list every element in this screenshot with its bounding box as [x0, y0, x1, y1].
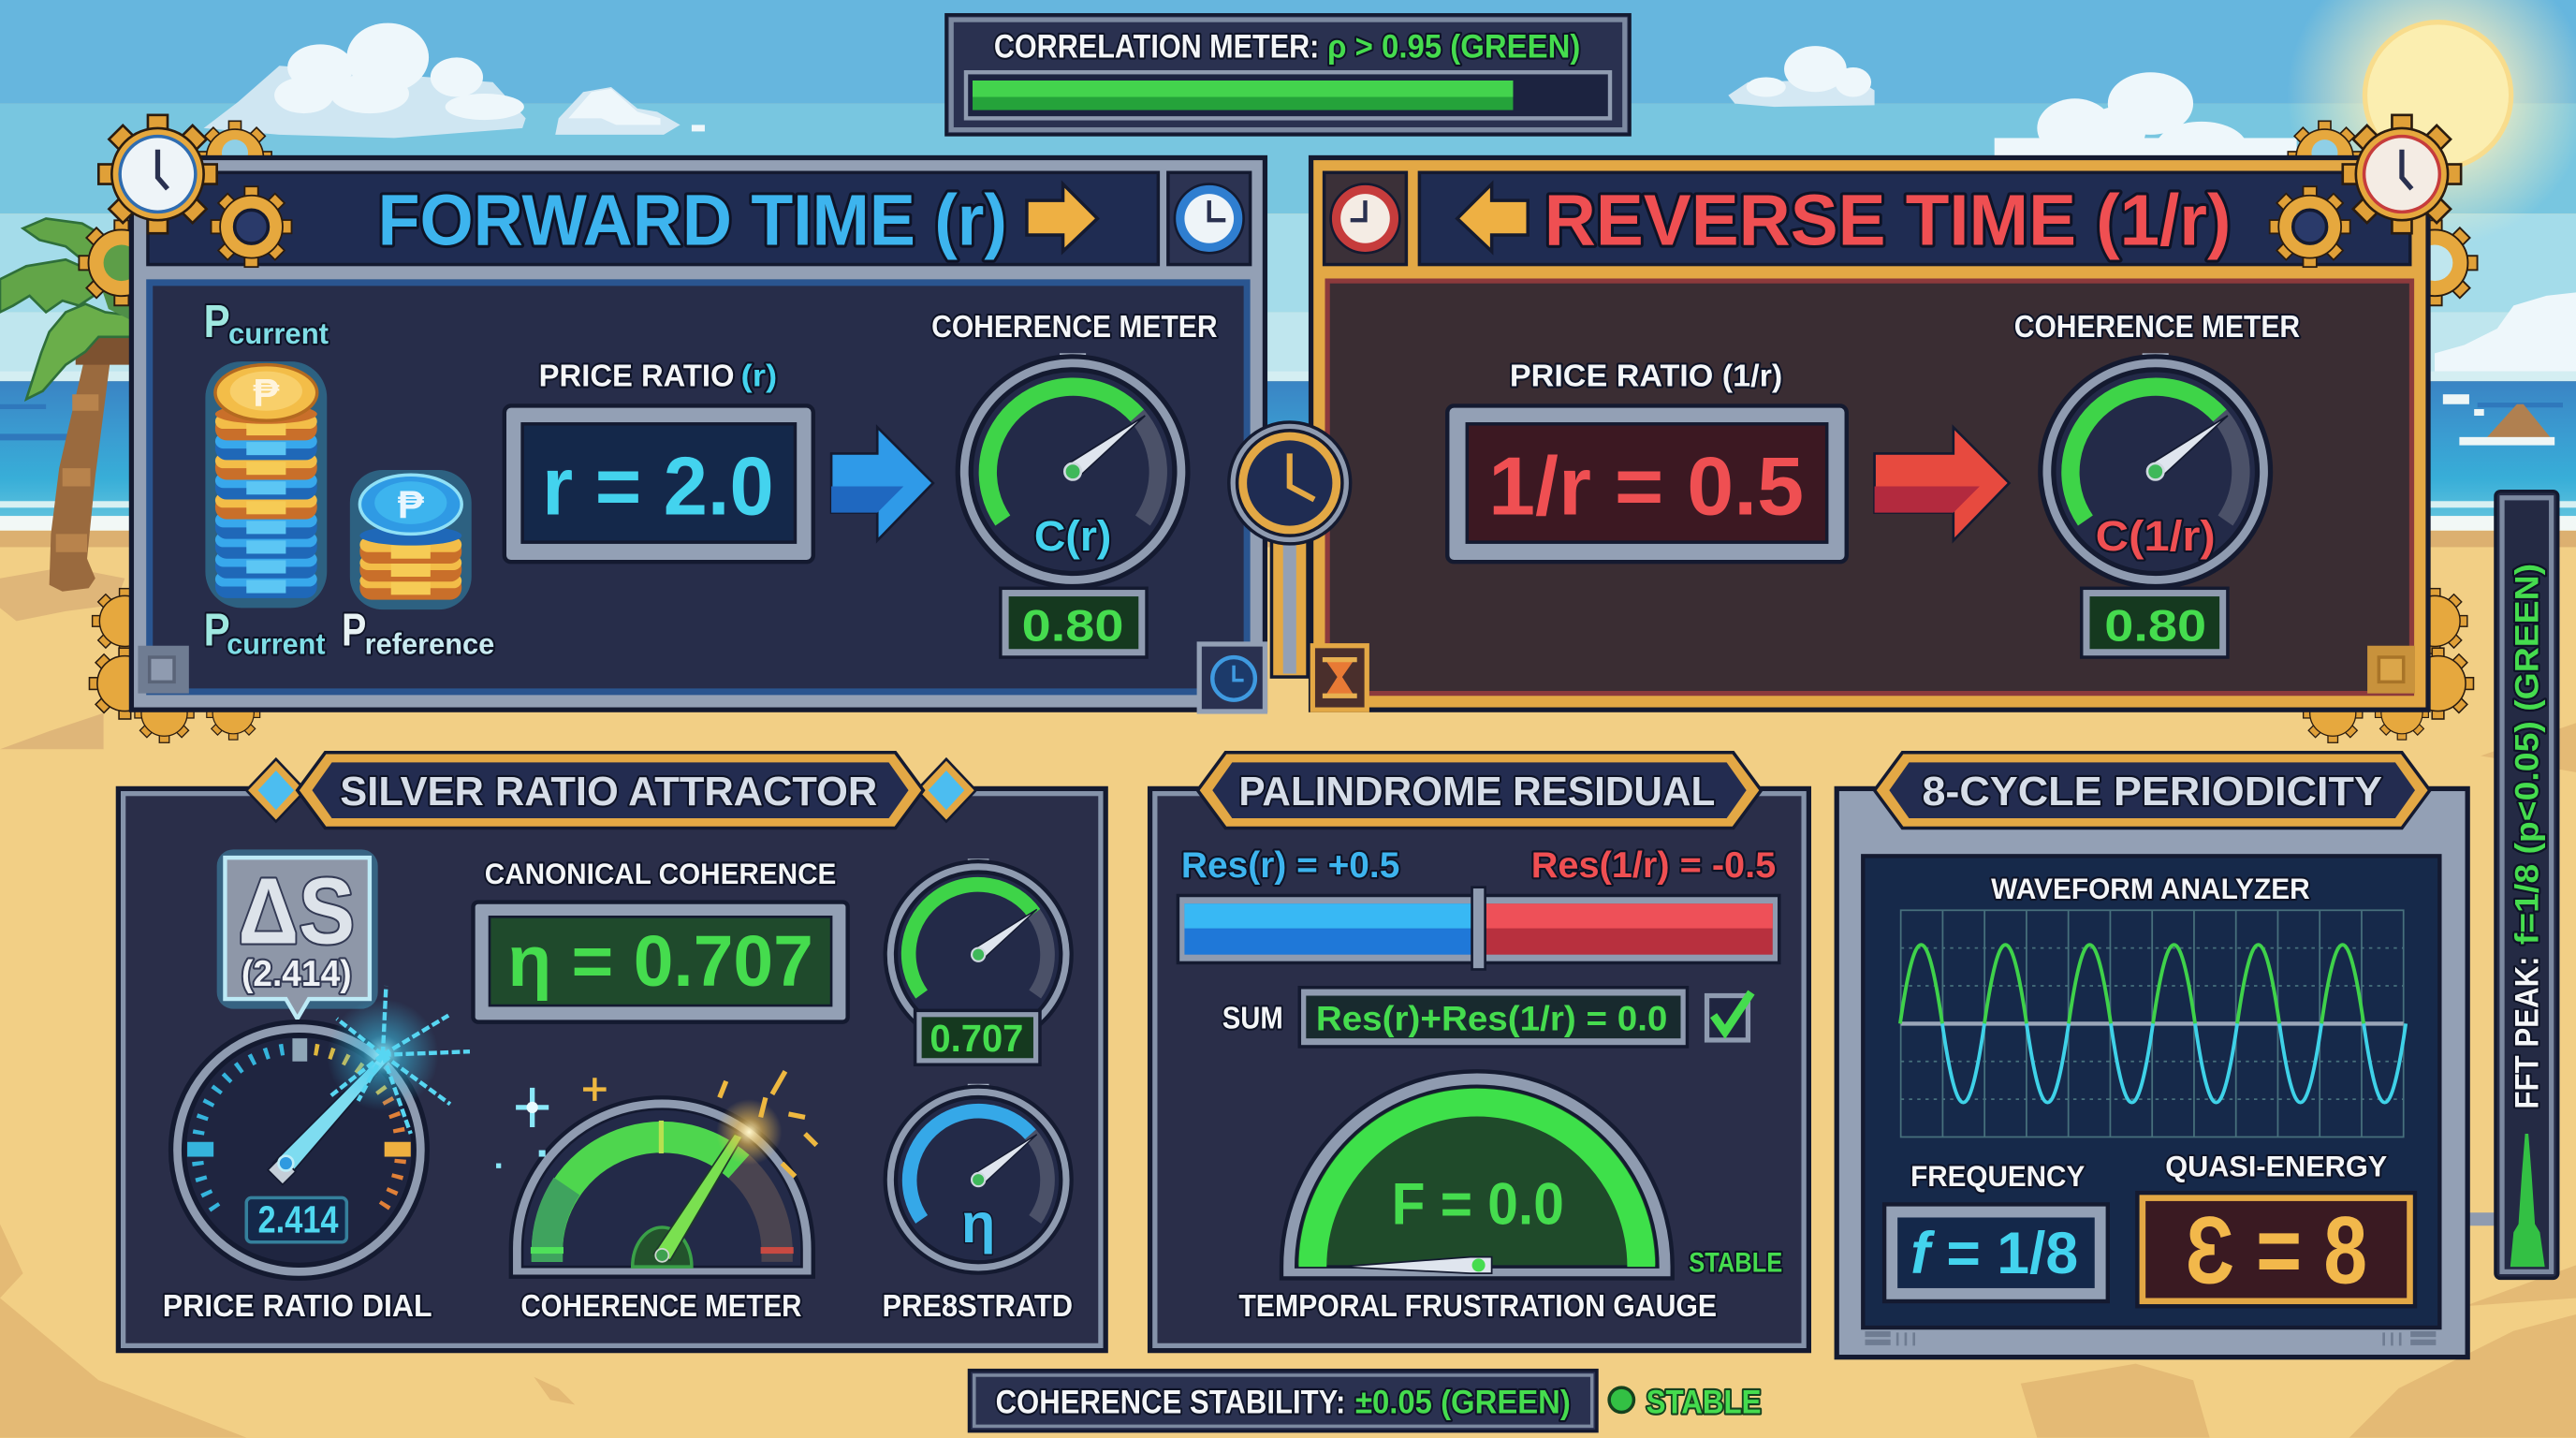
status: stable: STABLE — [1647, 1384, 1761, 1420]
gauge: C(1/r): C(1/r) — [2096, 512, 2216, 560]
icon: tall coin stack: ₱ — [253, 370, 280, 414]
readout: frequency — [1884, 1204, 2108, 1301]
label: canonical coherence: CANONICAL COHERENCE — [485, 857, 836, 890]
waveform analyzer — [1863, 856, 2439, 1328]
icon: reverse small gear — [2270, 186, 2350, 267]
clouds — [204, 23, 2576, 372]
label: sum: SUM — [1222, 1002, 1283, 1036]
rock in the sea — [2443, 394, 2554, 446]
value: C(r): 0.80 — [1022, 601, 1123, 651]
stability label — [996, 1384, 1571, 1420]
badge: delta S: ΔS — [238, 858, 355, 963]
forward header bar: FORWARD TIME (r) — [378, 181, 1007, 260]
panel: reverse time — [1311, 157, 2428, 710]
value: 0.707: 0.707 — [929, 1017, 1023, 1060]
icon: corner clock right — [1199, 644, 1265, 712]
panel: FFT peak — [2496, 492, 2558, 1278]
gauge: coherence meter arc — [511, 1097, 813, 1277]
heading plate: silver ratio attractor — [298, 753, 923, 829]
FFT label: FFT PEAK: — [2510, 956, 2546, 1109]
label: residual forward: Res(r) = +0.5 — [1181, 845, 1399, 886]
cloud: right large — [1995, 72, 2297, 174]
gauge: C(r): C(r) — [1034, 512, 1111, 560]
label: P reference — [342, 606, 494, 661]
gauge: temporal frustration: F = 0.0 — [1392, 1171, 1564, 1237]
label: P reference: P — [342, 606, 366, 656]
readout: sum: Res(r)+Res(1/r) = 0.0 — [1316, 999, 1667, 1037]
label: prestratd: PRE8STRATD — [882, 1289, 1073, 1324]
label: price ratio 1/r: PRICE RATIO (1/r) — [1510, 359, 1782, 393]
cloud: left small — [555, 87, 705, 135]
FFT spectrum spike — [2510, 1134, 2545, 1267]
label: price ratio dial: PRICE RATIO DIAL — [163, 1289, 432, 1324]
palm tree — [0, 218, 131, 592]
icon: short coin stack: ₱ — [398, 482, 425, 526]
label: temporal frustration gauge: TEMPORAL FRUSTRATION GAUGE — [1238, 1289, 1717, 1324]
readout: 1/r value: 1/r = 0.5 — [1488, 440, 1804, 532]
sun — [2287, 0, 2576, 246]
forward body — [150, 283, 1247, 692]
badge: delta S — [217, 849, 378, 1019]
readout: frequency: f = 1/8 — [1910, 1221, 2078, 1286]
FFT label — [2510, 564, 2546, 1109]
readout: 1/r value — [1447, 405, 1847, 562]
label: residual reverse: Res(1/r) = -0.5 — [1531, 845, 1776, 886]
label: P current bottom: P — [204, 606, 230, 656]
label: coherence meter forward: COHERENCE METER — [931, 310, 1218, 345]
sparkle: gold meter tip — [496, 1071, 816, 1177]
connector to FFT — [2465, 1212, 2500, 1225]
stability label: ±0.05 (GREEN) — [1355, 1384, 1571, 1420]
heading plate: 8-cycle periodicity — [1875, 753, 2430, 829]
value: 0.707 — [915, 1010, 1040, 1064]
diamonds — [246, 759, 976, 822]
label: stable: STABLE — [1689, 1247, 1782, 1278]
label: price ratio r: (r) — [741, 359, 777, 393]
label: quasi-energy: QUASI-ENERGY — [2165, 1150, 2387, 1183]
label: P current top — [204, 297, 329, 350]
label: P reference: reference — [365, 627, 494, 661]
label: P current bottom: current — [227, 627, 326, 661]
reverse header bar — [1419, 172, 2410, 265]
gears behind forward panel — [79, 121, 271, 742]
icon: hourglass — [1312, 646, 1367, 710]
heading plate: silver ratio attractor: SILVER RATIO ATTRACTOR — [340, 769, 877, 814]
stability label: COHERENCE STABILITY: — [996, 1384, 1345, 1420]
gauge: C(r) — [958, 353, 1188, 587]
correlation label — [994, 28, 1580, 65]
icon: corner badge left — [138, 646, 189, 694]
heading plate: palindrome residual: PALINDROME RESIDUAL — [1238, 769, 1715, 814]
readout: r value: r = 2.0 — [542, 440, 774, 532]
readout: quasi-energy: Ɛ = 8 — [2185, 1197, 2367, 1304]
arrow: red — [1875, 427, 2009, 540]
label: P current top: P — [204, 297, 230, 347]
panel: silver ratio attractor — [118, 753, 1105, 1351]
readout: sum — [1299, 988, 1687, 1047]
icon: forward small gear — [212, 186, 291, 267]
readout: r value — [505, 405, 813, 562]
heading plate: palindrome residual — [1197, 753, 1761, 829]
arrow: blue — [831, 427, 933, 540]
icon: forward header clock — [1168, 172, 1251, 265]
panel: palindrome residual — [1150, 753, 1808, 1351]
icon: forward big gear clock — [98, 115, 217, 233]
label: coherence meter: COHERENCE METER — [520, 1289, 801, 1324]
gauge: small eta green — [886, 858, 1072, 1048]
icon: reverse header clock — [1325, 172, 1406, 265]
heading plate: 8-cycle periodicity: 8-CYCLE PERIODICITY — [1922, 769, 2382, 814]
label: P current top: current — [228, 316, 329, 350]
gauge: eta blue: η — [961, 1192, 995, 1255]
value: C(r) — [1001, 588, 1147, 657]
icon: check mark — [1707, 992, 1751, 1040]
label: P current bottom — [204, 606, 326, 661]
gears behind reverse panel — [2288, 121, 2478, 742]
forward arrow icon — [1027, 184, 1097, 252]
correlation bar — [966, 72, 1610, 118]
waveform analyzer: WAVEFORM ANALYZER — [1991, 872, 2310, 905]
gauge: C(1/r) — [2041, 353, 2271, 587]
gauge: price ratio dial — [171, 1022, 427, 1278]
residual bar — [1178, 888, 1779, 969]
icon: tall coin stack — [205, 361, 327, 608]
value: C(1/r): 0.80 — [2104, 601, 2206, 651]
gauge: eta blue — [886, 1084, 1072, 1273]
value: 2.414: 2.414 — [258, 1197, 339, 1240]
status: stable — [1609, 1384, 1761, 1420]
frame detail — [1866, 1332, 2435, 1345]
label: coherence meter reverse: COHERENCE METER — [2014, 310, 2300, 345]
correlation label: CORRELATION METER: — [994, 28, 1319, 65]
panel: forward time — [131, 157, 1265, 712]
value: C(1/r) — [2082, 588, 2228, 657]
coherence stability bar — [970, 1371, 1597, 1431]
label: frequency: FREQUENCY — [1910, 1159, 2085, 1193]
readout: eta — [473, 902, 848, 1022]
badge: delta S: (2.414) — [242, 954, 352, 994]
icon: corner badge right — [2367, 646, 2415, 694]
center clock connector — [1229, 422, 1351, 677]
gauge: temporal frustration — [1281, 1071, 1673, 1278]
waveform negative — [1942, 1023, 2406, 1103]
reverse body — [1327, 281, 2411, 694]
waveform positive — [1900, 945, 2364, 1023]
sparkle: dial tip — [327, 986, 470, 1134]
reverse arrow icon — [1457, 184, 1528, 252]
reverse header bar: REVERSE TIME (1/r) — [1544, 181, 2231, 260]
correlation label: ρ > 0.95 (GREEN) — [1327, 28, 1580, 65]
panel: 8-cycle periodicity — [1837, 753, 2467, 1357]
forward header bar — [148, 172, 1158, 265]
cloud: right small — [1728, 46, 1875, 107]
readout: eta: η = 0.707 — [507, 921, 813, 1002]
FFT label: f=1/8 (p<0.05) (GREEN) — [2510, 564, 2546, 945]
icon: short coin stack — [350, 470, 472, 609]
correlation meter — [946, 15, 1630, 135]
waveform grid — [1901, 910, 2404, 1137]
cloud: far right horizon — [2435, 292, 2576, 372]
icon: reverse big gear clock — [2343, 115, 2461, 233]
cloud: left large — [204, 23, 526, 138]
label: price ratio r: PRICE RATIO — [539, 359, 735, 393]
